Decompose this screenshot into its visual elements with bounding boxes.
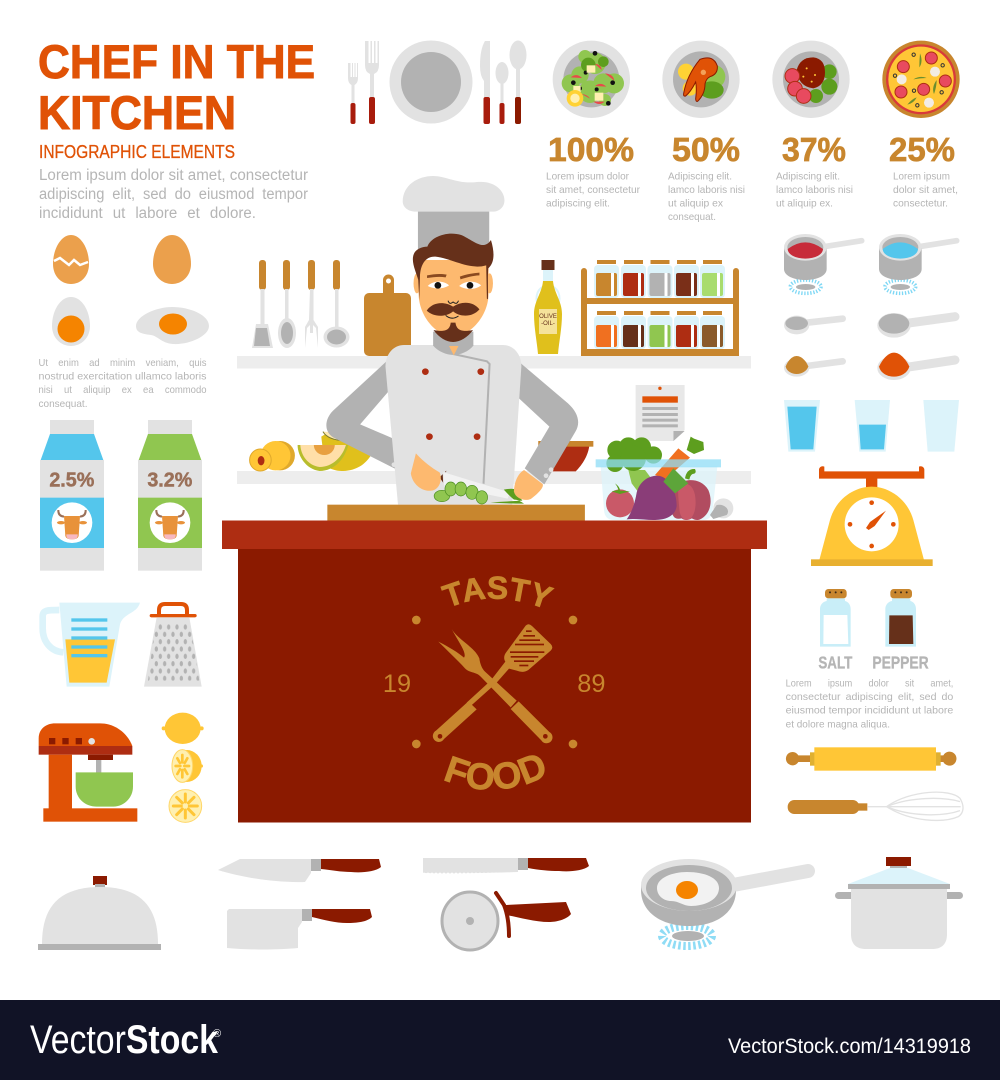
chef: [326, 176, 585, 521]
chef collar: [433, 332, 473, 355]
fruit on lower shelf: [250, 428, 377, 471]
egg text: consequat.: [38, 398, 88, 410]
bowl rim: [596, 459, 721, 467]
stat: 50%: 50%: [672, 131, 740, 168]
icon: milk carton 3.2%: [138, 420, 202, 571]
title: KITCHEN: [38, 86, 236, 139]
icon: meat fork: [305, 260, 318, 348]
icon: whisk: [788, 792, 963, 820]
logo word: tasty: TASTY: [440, 576, 554, 608]
icon: pepper shaker: [885, 589, 916, 647]
egg text: nisi ut aliquip ex ea commodo: [38, 384, 207, 396]
text: salt and pepper: eiusmod tempor incididunt ut labore: [786, 706, 954, 717]
icon: santoku knife: [218, 859, 381, 882]
intro text: Lorem ipsum dolor sit amet, consectetur: [39, 167, 308, 184]
label: salt: SALT: [818, 652, 853, 672]
icon: cloche: [38, 876, 161, 950]
registered mark: ®: [213, 1028, 221, 1040]
vegetable bowl: [596, 437, 733, 520]
beetroot: [627, 468, 688, 520]
dish: salmon: [662, 41, 740, 118]
icon: measuring jug: [43, 603, 140, 687]
title: [38, 35, 315, 139]
icon: boiled egg: [52, 297, 90, 346]
percent stats: [548, 131, 955, 168]
text: salt and pepper: consectetur adipiscing elit, sed do: [786, 692, 954, 703]
caption 2: Adipiscing elit.: [668, 170, 732, 182]
logo year left: 19: [383, 670, 411, 698]
sliced cucumber: [434, 482, 488, 504]
icon: small spoon: [496, 62, 508, 124]
green stem: [490, 489, 524, 504]
icon: turner: [252, 260, 273, 348]
stat: 37%: 37%: [782, 131, 846, 168]
icon: grater: [144, 604, 202, 687]
logo word: food: FOOD: [444, 755, 545, 790]
caption 2: lamco laboris nisi: [668, 184, 745, 196]
footer bar: [0, 1000, 1000, 1080]
icon: cutting board: [364, 274, 411, 356]
dish: salad: [553, 41, 630, 118]
dish: steak: [772, 41, 850, 118]
recipe note: [636, 385, 685, 441]
icon: pan with sauce: [784, 234, 862, 293]
broccoli: [606, 437, 662, 497]
icon: fried egg: [136, 307, 209, 344]
icon: milk carton 2.5%: [40, 420, 104, 571]
icon: cleaver: [227, 909, 372, 950]
kitchen utensils: [252, 260, 739, 356]
text: salt and pepper: et dolore magna aliqua.: [786, 719, 890, 730]
icon: half lemon: [172, 750, 203, 782]
icon: small fork: [348, 63, 358, 124]
right column items: [784, 400, 963, 820]
icon: milk carton 3.2%: 3.2%: [147, 469, 192, 492]
icon: milk carton 2.5%: 2.5%: [49, 469, 94, 492]
logo spatula: [433, 624, 552, 742]
icon: half glass: [855, 400, 890, 452]
icon: peach: [250, 441, 295, 471]
icon: ladle: [324, 260, 350, 348]
stat captions: [546, 170, 958, 223]
chef right arm: [519, 363, 578, 484]
icon: table knife: [480, 41, 490, 124]
icon: frying pan with egg: [641, 859, 808, 946]
caption 3: Adipiscing elit.: [776, 170, 840, 182]
icon: olive oil bottle: OLIVE: [539, 314, 557, 320]
icon: small spoon with spice: [784, 356, 843, 377]
chef hat: [403, 176, 504, 253]
text: salt and pepper: Lorem ipsum dolor sit amet,: [786, 679, 953, 690]
icon: olive oil bottle: -OIL-: [541, 321, 555, 327]
chef left arm: [326, 362, 416, 476]
logo year right: 89: [577, 670, 605, 698]
caption 2: consequat.: [668, 211, 716, 223]
icon: large spoon with spice: [877, 353, 955, 380]
egg text: Ut enim ad minim veniam, quis: [38, 357, 206, 369]
icon: full glass: [784, 400, 820, 452]
icon: red bowl: [538, 441, 593, 471]
icon: large fork: [365, 41, 379, 124]
chef head: [413, 234, 493, 342]
icon: salt shaker: [820, 589, 851, 647]
counter: [222, 520, 767, 822]
bottom row tools: [38, 857, 963, 950]
icon: large spoon: [510, 40, 526, 124]
icon: bread knife: [423, 858, 589, 874]
text: salt and pepper: [786, 679, 954, 730]
mushroom: [710, 498, 733, 519]
intro text: incididunt ut labore et dolore.: [39, 205, 256, 222]
chef hands: [411, 453, 543, 500]
intro text: [39, 167, 308, 222]
icon: whole egg: [153, 235, 191, 284]
icon: melon: [298, 428, 377, 471]
bowl body: [601, 467, 717, 520]
logo dots: [412, 616, 577, 748]
icon: pan with water: [879, 234, 957, 293]
egg text: [38, 357, 207, 410]
caption 2: ut aliquip ex: [668, 198, 724, 210]
title: CHEF IN THE: [38, 35, 315, 88]
icon: empty glass: [923, 400, 959, 452]
icon: small measuring spoon: [784, 316, 843, 334]
icon: rolling pin: [786, 747, 956, 771]
stat: 100%: 100%: [548, 131, 634, 168]
chef knife: [440, 471, 511, 499]
carrot: [655, 437, 704, 479]
icon: large measuring spoon: [877, 313, 955, 338]
pans and spoons: [784, 234, 957, 380]
icon: cracked egg: [53, 235, 89, 284]
intro text: adipiscing elit, sed do eiusmod tempor: [39, 186, 308, 203]
counter body: [238, 549, 751, 822]
counter top: [222, 520, 767, 549]
logo fork: [438, 629, 553, 743]
caption 3: [776, 170, 853, 210]
cuff buttons: [392, 462, 553, 478]
caption 4: consectetur.: [893, 198, 948, 210]
icon: stock pot: [835, 857, 963, 949]
logo: tasty food: [383, 576, 605, 790]
egg text: nostrud exercitation ullamco laboris: [38, 370, 206, 382]
caption 4: [893, 170, 958, 210]
caption 3: ut aliquip ex.: [776, 198, 833, 210]
icons: tableware: [348, 40, 526, 124]
caption 3: lamco laboris nisi: [776, 184, 853, 196]
caption 4: dolor sit amet,: [893, 184, 958, 196]
caption 2: [668, 170, 745, 223]
icon: whole lemon: [162, 713, 204, 744]
eggs: [52, 235, 209, 346]
icon: kitchen spoon: [278, 260, 296, 348]
icon: plate: [390, 40, 472, 124]
left column items: [39, 420, 204, 822]
icon: lemon slice: [169, 790, 202, 822]
dishes row: [553, 41, 960, 118]
icon: kitchen scale: [811, 466, 933, 566]
cutting board on counter: [327, 505, 585, 521]
shelves: [237, 356, 751, 484]
subtitle: INFOGRAPHIC ELEMENTS: [39, 142, 235, 162]
tomato: [606, 483, 634, 517]
caption 1: adipiscing elit.: [546, 198, 610, 210]
caption 1: Lorem ipsum dolor: [546, 170, 629, 182]
caption 1: sit amet, consectetur: [546, 184, 640, 196]
stat: 25%: 25%: [889, 131, 955, 168]
caption 1: [546, 170, 640, 210]
icon: stand mixer: [39, 723, 137, 822]
caption 4: Lorem ipsum: [893, 170, 950, 182]
spice rack: [581, 260, 739, 356]
icon: olive oil bottle: [534, 260, 562, 354]
watermark url: VectorStock.com/14319918: [728, 1035, 971, 1058]
icon: pizza cutter: [442, 892, 571, 950]
pepper: [672, 469, 711, 520]
chef jacket: [385, 345, 521, 505]
watermark logo: VectorStock: [30, 1018, 219, 1062]
label: pepper: PEPPER: [872, 652, 929, 672]
dish: pizza: [882, 41, 960, 118]
